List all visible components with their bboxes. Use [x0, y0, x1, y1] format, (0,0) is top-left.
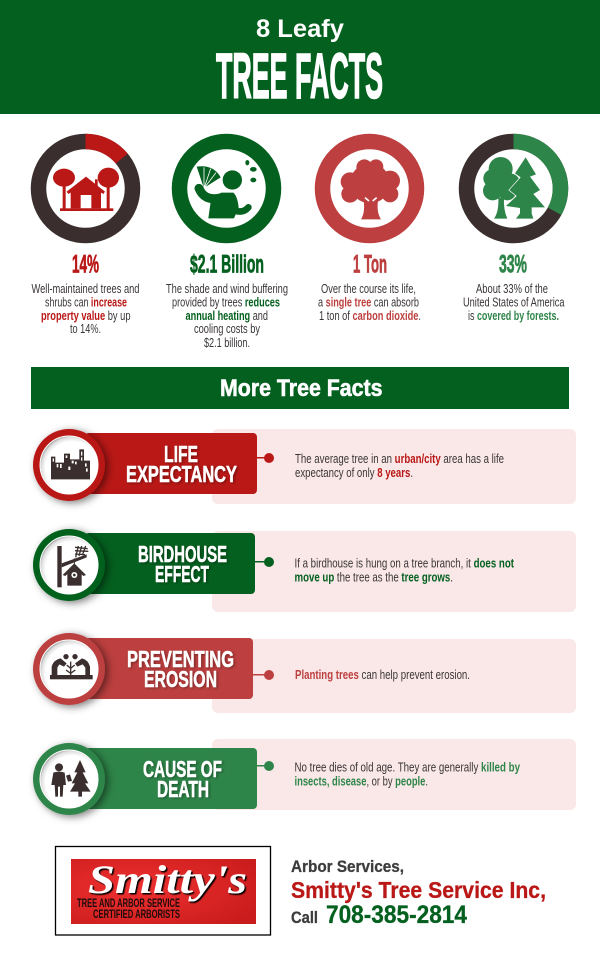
stat description: is covered by forests. — [468, 308, 559, 323]
stat description: a single tree can absorb — [318, 294, 419, 310]
contact block — [291, 857, 546, 929]
fact text panel: expectancy of only 8 years. — [295, 465, 413, 480]
stat value: 1 Ton — [353, 250, 387, 278]
label bar — [85, 533, 255, 594]
title line: 8 Leafy: 8 Leafy — [256, 15, 344, 43]
contact line: call: Call — [291, 908, 318, 927]
icon: trees — [483, 157, 545, 219]
stat description: property value by up — [41, 308, 130, 323]
badge: birdhouse icon — [33, 529, 105, 601]
company logo — [56, 846, 270, 935]
fact text panel: insects, disease, or by people. — [294, 774, 428, 788]
donut chart 14% — [38, 142, 132, 236]
label bar: PREVENTING — [127, 646, 234, 672]
fact text panel: move up the tree as the tree grows. — [294, 570, 453, 584]
label bar: CAUSE OF — [143, 756, 222, 782]
stat description — [166, 281, 288, 350]
stat description — [318, 281, 421, 323]
stat: $2.1 billion cost savings — [166, 142, 288, 350]
stat description: to 14%. — [70, 321, 101, 336]
fact row: preventing erosion — [33, 633, 576, 713]
fact text panel — [212, 429, 576, 504]
label bar: EXPECTANCY — [126, 461, 237, 487]
label bar: BIRDHOUSE — [138, 541, 227, 567]
icon: person with fan — [197, 160, 257, 218]
stat description: The shade and wind buffering — [166, 281, 288, 296]
fact row: birdhouse effect — [33, 529, 576, 612]
stat value: $2.1 Billion — [190, 250, 264, 278]
stat description: About 33% of the — [476, 281, 548, 296]
icon: oak tree — [341, 159, 400, 219]
fact text panel — [212, 531, 576, 612]
fact text panel — [212, 739, 576, 810]
fact text panel: The average tree in an urban/city area has a life — [295, 451, 504, 466]
label bar: EROSION — [144, 666, 217, 692]
icon: house and trees — [53, 168, 119, 211]
fact text panel: Planting trees can help prevent erosion. — [295, 667, 470, 682]
stat value: 14% — [72, 250, 99, 278]
stat description: 1 ton of carbon dioxide. — [319, 308, 421, 323]
stat: 14% property value — [32, 142, 140, 336]
donut chart 33% — [466, 142, 560, 236]
contact line: arbor services: Arbor Services, — [291, 857, 404, 876]
contact line: company name: Smitty's Tree Service Inc, — [291, 877, 546, 903]
logo script wordmark: Smitty's — [88, 857, 247, 902]
stat description: $2.1 billion. — [204, 335, 250, 350]
stat: 1 ton carbon dioxide — [318, 142, 421, 323]
section heading banner — [31, 367, 569, 409]
logo tagline — [77, 898, 180, 921]
fact row: life expectancy — [33, 429, 576, 504]
badge: person and tree icon — [33, 743, 105, 815]
ring — [180, 142, 274, 236]
fact text panel: No tree dies of old age. They are generally killed by — [294, 760, 521, 774]
fact text panel: If a birdhouse is hung on a tree branch, it does not — [294, 556, 514, 570]
label bar: LIFE — [164, 441, 198, 467]
stat description — [463, 281, 565, 323]
connector — [255, 557, 274, 567]
section heading text: More Tree Facts — [220, 375, 382, 402]
badge: planting icon — [33, 633, 105, 705]
stat description: Over the course its life, — [321, 281, 416, 296]
stat description: annual heating and — [186, 308, 268, 323]
fact text panel — [212, 639, 576, 713]
contact line: phone number: 708-385-2814 — [326, 901, 467, 929]
connector — [257, 453, 274, 463]
label bar — [85, 748, 257, 809]
label bar — [85, 638, 253, 699]
logo tagline: CERTIFIED ARBORISTS — [93, 909, 180, 921]
stat description: Well-maintained trees and — [32, 281, 140, 296]
label bar — [85, 433, 257, 494]
connector — [253, 670, 274, 680]
header banner — [0, 0, 600, 114]
ring — [322, 142, 416, 236]
stat description: provided by trees reduces — [172, 294, 280, 310]
badge: city icon — [33, 429, 105, 501]
stat description: shrubs can increase — [45, 294, 127, 310]
stat description: cooling costs by — [194, 321, 260, 336]
fact row: cause of death — [33, 739, 576, 815]
stat: 33% forest cover — [463, 142, 565, 323]
label bar: DEATH — [157, 776, 209, 802]
logo tagline: TREE AND ARBOR SERVICE — [77, 898, 180, 910]
stat value: 33% — [499, 250, 527, 278]
connector — [257, 761, 274, 771]
label bar: EFFECT — [155, 561, 209, 587]
stat description — [32, 281, 140, 336]
